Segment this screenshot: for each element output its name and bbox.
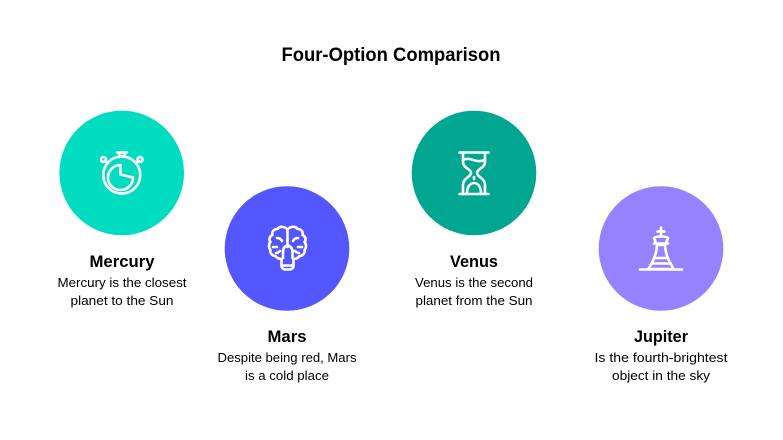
- heading: Jupiter: Jupiter: [634, 327, 688, 346]
- circle: Mercury: [59, 111, 184, 235]
- description: Jupiter: [594, 350, 728, 383]
- title: Four-Option Comparison: [282, 44, 500, 66]
- description: Mercury: Mercury is the closest: [58, 275, 187, 290]
- heading: Mars: Mars: [268, 327, 306, 346]
- description: Jupiter: object in the sky: [612, 368, 711, 383]
- heading: Venus: Venus: [450, 252, 498, 271]
- description: Mars: [218, 350, 357, 383]
- icon: hourglass: [460, 152, 488, 194]
- panel: Jupiter: [594, 186, 728, 383]
- circle: Mars: [225, 186, 349, 311]
- description: Mars: Despite being red, Mars: [218, 350, 357, 365]
- icon: chess king: [640, 228, 682, 270]
- panel: Mars: [218, 186, 357, 383]
- heading: Mercury: Mercury: [90, 252, 155, 271]
- description: Venus: planet from the Sun: [416, 293, 532, 308]
- panel: Venus: [412, 111, 536, 308]
- icon: brain: [269, 227, 306, 270]
- circle: Venus: [412, 111, 536, 235]
- description: Mercury: [58, 275, 187, 308]
- description: Jupiter: Is the fourth-brightest: [594, 350, 728, 365]
- description: Venus: Venus is the second: [415, 275, 533, 290]
- description: Venus: [415, 275, 533, 308]
- description: Mars: is a cold place: [245, 368, 329, 383]
- description: Mercury: planet to the Sun: [70, 293, 174, 308]
- icon: stopwatch: [101, 152, 142, 194]
- panel: Mercury: [58, 111, 187, 308]
- circle: Jupiter: [599, 186, 723, 311]
